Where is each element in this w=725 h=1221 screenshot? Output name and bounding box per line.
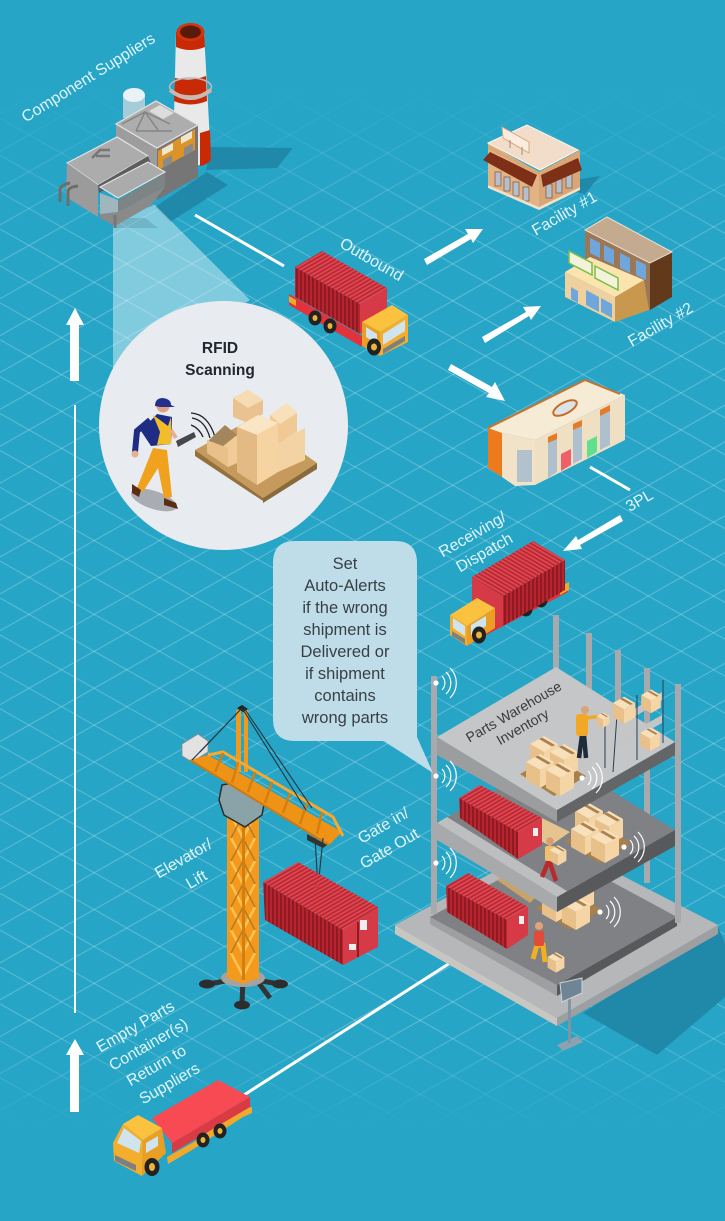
panel: rfid scanning [99, 301, 348, 550]
heading: rfid scanning: RFID [202, 340, 238, 357]
callout text: Delivered or [301, 643, 390, 661]
label: elevator lift: Elevator/ [152, 836, 216, 882]
icon: facility 2 [565, 217, 672, 322]
speech bubble: auto-alerts [273, 541, 433, 773]
crane counterweight [182, 734, 208, 762]
callout text: wrong parts [301, 709, 388, 727]
label: receiving and dispatch: Dispatch [454, 530, 516, 576]
arrow: to facility 1 [424, 229, 483, 265]
connector line: supplier to outbound truck [195, 215, 284, 266]
icon: pallet of boxes [195, 390, 317, 503]
arrow: to 3PL [448, 364, 505, 401]
truck: outbound [289, 251, 408, 356]
callout text: Auto-Alerts [304, 577, 386, 595]
crane [182, 705, 343, 1010]
container: on crane [263, 862, 378, 965]
warehouse shadow [583, 927, 725, 1055]
label: empty parts containers return: Container(s) [106, 1016, 191, 1074]
label: empty parts containers return: Return to [124, 1042, 190, 1090]
beam shadow [115, 218, 158, 228]
icon: water tank [123, 88, 145, 118]
icon: chimney [170, 23, 212, 166]
pallets: middle floor [565, 803, 631, 863]
middle floor [437, 756, 675, 912]
container: middle floor [459, 785, 542, 859]
crane jib [190, 752, 343, 845]
truck: empty return [113, 1080, 252, 1176]
label: empty parts containers return: Empty Parts [94, 998, 178, 1056]
label: receiving and dispatch: Receiving/ [436, 509, 510, 561]
label: gate in, gate out: Gate Out [357, 825, 423, 873]
label: component suppliers: Component Suppliers [19, 30, 158, 126]
warehouse [395, 615, 718, 1051]
pallet: behind container [530, 817, 570, 846]
worker: top floor [576, 706, 609, 758]
crane mast [227, 815, 259, 984]
crane cab [219, 781, 264, 827]
top floor [437, 667, 675, 822]
callout text [301, 555, 390, 727]
back posts [553, 615, 650, 883]
base slab [395, 840, 718, 1026]
container: bottom floor [446, 873, 528, 949]
sign post [557, 978, 583, 1051]
truck: receiving [450, 541, 569, 646]
pallet: flat goods [497, 876, 537, 903]
crane hook block [307, 834, 327, 848]
crane upper tower [236, 705, 248, 772]
crane cables [192, 708, 323, 888]
callout text: shipment is [303, 621, 387, 639]
label: gate in, gate out: Gate in/ [355, 804, 413, 847]
shelving [605, 680, 663, 772]
label: outbound: Outbound [337, 235, 406, 285]
callout text: Set [333, 555, 358, 573]
arrow: to receiving truck [563, 515, 623, 551]
arrow: up to suppliers [66, 308, 84, 381]
icon: 3PL building [488, 380, 625, 486]
callout text: contains [314, 687, 376, 705]
arrow: vertical line [74, 405, 76, 1013]
pallet: top floor [520, 736, 586, 796]
label: facility 1: Facility #1 [529, 189, 600, 239]
label: empty parts containers return [94, 998, 203, 1108]
icon: facility 1 [483, 125, 600, 210]
icon: worker with scanner [128, 398, 215, 516]
label: elevator lift: Lift [183, 867, 211, 893]
arrow: up from return truck [66, 1039, 84, 1112]
arrow: to facility 2 [482, 306, 541, 343]
label: facility 2: Facility #2 [625, 300, 696, 350]
label: empty parts containers return: Suppliers [137, 1060, 203, 1108]
connector line: warehouse to return truck [244, 963, 450, 1095]
label: parts warehouse inventory: Parts Warehouse [463, 678, 564, 746]
label: gate in, gate out [355, 804, 423, 873]
rfid signals [433, 668, 644, 927]
crane feet [199, 969, 288, 1010]
scan beam [113, 205, 250, 385]
bottom floor [430, 850, 677, 996]
factory building [60, 101, 198, 228]
label: parts warehouse inventory: Inventory [494, 705, 551, 748]
front posts [431, 676, 681, 923]
label: 3PL: 3PL [623, 487, 656, 516]
worker: middle floor [542, 837, 566, 881]
callout text: if the wrong [302, 599, 388, 617]
heading: rfid scanning [185, 340, 255, 379]
factory shadow [155, 147, 293, 222]
heading: rfid scanning: Scanning [185, 362, 255, 379]
worker: bottom floor [533, 922, 564, 973]
callout text: if shipment [305, 665, 385, 683]
connector line: 3PL [590, 467, 630, 490]
pallet: bottom floor [536, 870, 602, 930]
